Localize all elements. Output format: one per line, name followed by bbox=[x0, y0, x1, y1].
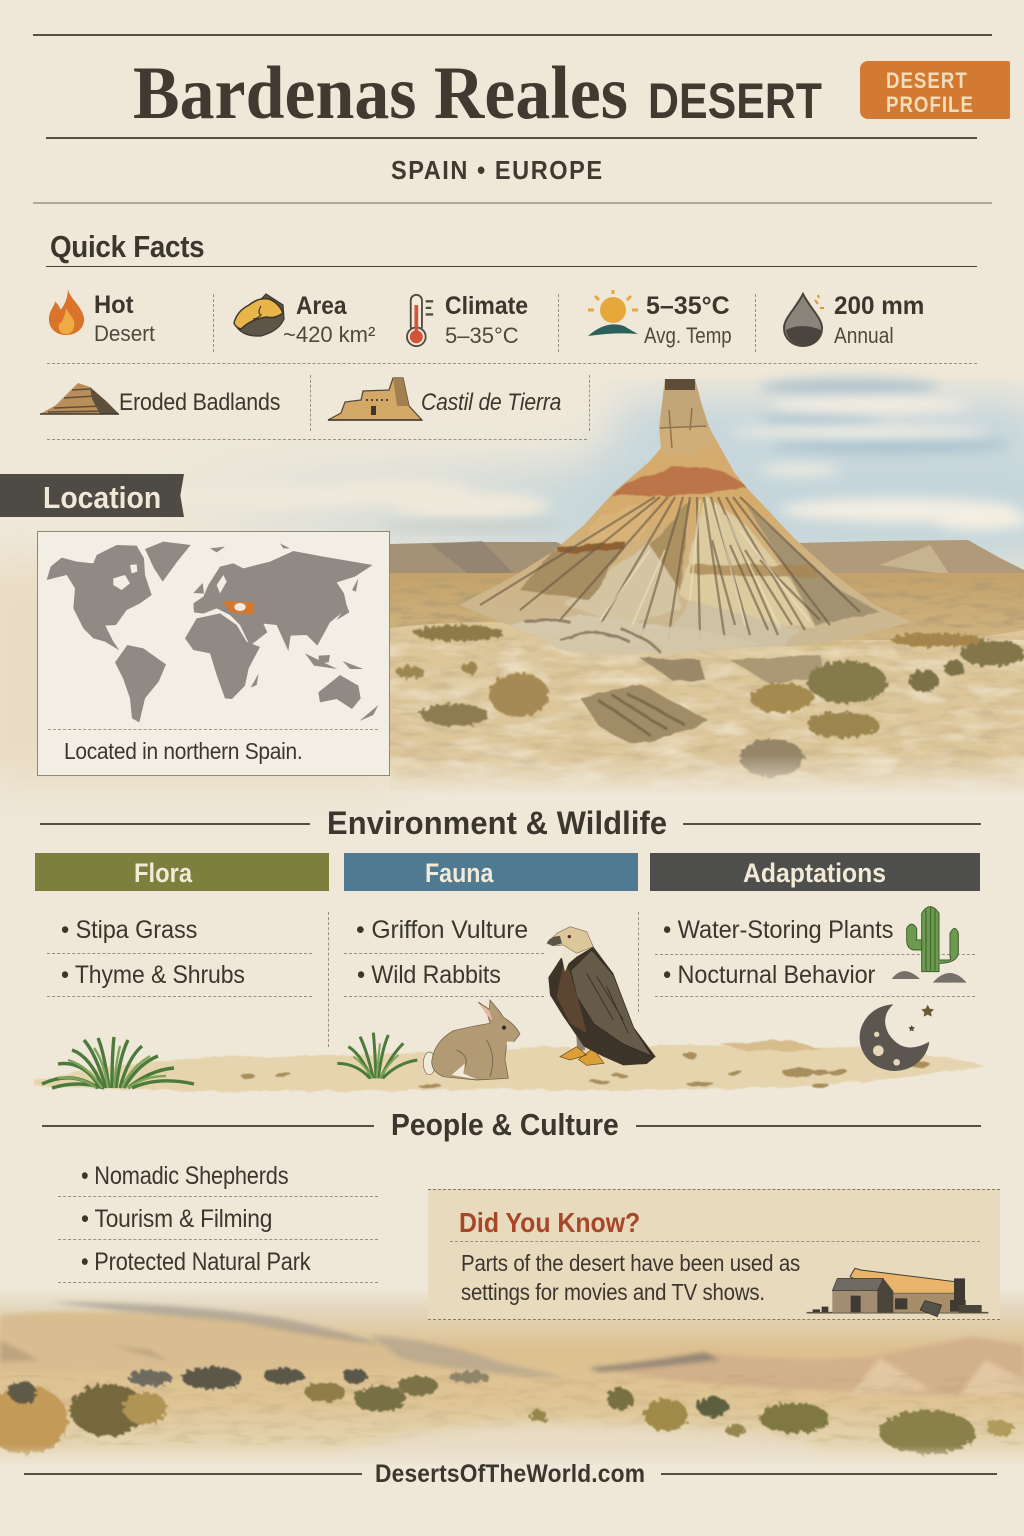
icon: film set building bbox=[806, 1268, 988, 1318]
people and culture list: • Tourism & Filming bbox=[81, 1205, 272, 1233]
fact: hot desert: Hot bbox=[94, 291, 134, 319]
flora ground strip bbox=[35, 1040, 985, 1091]
left sand tint behind map bbox=[0, 560, 410, 785]
background landscape illustration bbox=[0, 372, 1024, 1462]
callout: did you know bbox=[428, 1189, 1000, 1320]
icon: badlands bbox=[40, 383, 119, 415]
header rule top bbox=[33, 34, 992, 36]
fact: eroded badlands: Eroded Badlands bbox=[119, 389, 280, 416]
people and culture list: • Protected Natural Park bbox=[81, 1248, 311, 1276]
bottom landscape bbox=[0, 1285, 1024, 1470]
panel: adaptations: • Nocturnal Behavior bbox=[663, 961, 875, 989]
flora header: Flora bbox=[134, 858, 192, 888]
adaptations header bbox=[650, 853, 980, 891]
icon: cactus bbox=[892, 906, 966, 983]
distant mesas bbox=[390, 540, 1024, 578]
fact: annual rainfall bbox=[834, 292, 924, 348]
title: Bardenas Reales bbox=[133, 52, 628, 135]
fact: average temperature: 5–35°C bbox=[646, 292, 730, 320]
heading: people & culture: People & Culture bbox=[391, 1107, 619, 1142]
title: DESERT bbox=[648, 73, 822, 129]
fact: hot desert: Desert bbox=[94, 321, 155, 346]
icon: griffon vulture bbox=[546, 926, 656, 1066]
panel: location map bbox=[37, 531, 390, 776]
fact: area: ~420 km² bbox=[283, 322, 375, 347]
badge: desert profile bbox=[860, 61, 1010, 119]
adaptations header: Adaptations bbox=[743, 858, 886, 888]
lower landscape edge fade bbox=[0, 1445, 1024, 1470]
fact: climate bbox=[445, 292, 528, 348]
adaptations list: • Water-Storing Plants bbox=[663, 916, 893, 944]
fact: annual rainfall: 200 mm bbox=[834, 292, 924, 320]
Castil de Tierra butte bbox=[450, 375, 920, 660]
flora header bbox=[35, 853, 329, 891]
badge: desert profile: DESERT bbox=[886, 68, 968, 93]
panel: flora bbox=[35, 853, 329, 997]
callout: did you know: settings for movies and TV shows. bbox=[461, 1279, 765, 1305]
flora list: • Stipa Grass bbox=[61, 916, 197, 944]
upper shrubs bbox=[396, 625, 1024, 777]
fact: average temperature: Avg. Temp bbox=[644, 323, 732, 348]
people and culture list bbox=[58, 1162, 378, 1283]
icon: thermometer bbox=[406, 294, 434, 348]
footer rule and site name: DesertsOfTheWorld.com bbox=[375, 1460, 645, 1488]
panel: quick facts row 1 bbox=[48, 289, 924, 348]
heading: environment & wildlife: Environment & Wildlife bbox=[327, 805, 667, 841]
fact: climate: Climate bbox=[445, 292, 528, 320]
fact: climate: 5–35°C bbox=[445, 323, 519, 348]
panel: fauna bbox=[344, 853, 638, 997]
panel: quick facts row 2 bbox=[40, 377, 561, 421]
heading: quick facts: Quick Facts bbox=[50, 229, 204, 264]
icon: grass clump bbox=[41, 1036, 194, 1090]
callout: did you know: Parts of the desert have been used as bbox=[461, 1250, 800, 1276]
fact: area: Area bbox=[296, 292, 347, 320]
icon: flame bbox=[48, 289, 84, 335]
icon: shrub bbox=[337, 1032, 418, 1080]
fauna header: Fauna bbox=[425, 858, 493, 888]
icon: sun over land bbox=[588, 290, 638, 336]
icon: area rock bbox=[233, 293, 285, 337]
desert floor bbox=[390, 573, 1024, 800]
sky bbox=[150, 378, 1024, 565]
icon: water drop bbox=[783, 292, 824, 347]
butte foreground mounds bbox=[525, 620, 760, 654]
icon: moon and stars bbox=[860, 1004, 934, 1071]
subtitle: SPAIN • EUROPE bbox=[391, 155, 604, 185]
fact: area bbox=[283, 292, 375, 347]
people and culture list: • Nomadic Shepherds bbox=[81, 1162, 288, 1190]
icon: castle ruin bbox=[328, 377, 424, 421]
badge: desert profile: PROFILE bbox=[886, 92, 974, 117]
map caption: Located in northern Spain. bbox=[64, 738, 302, 764]
fact: hot desert bbox=[94, 291, 155, 346]
location tab: Location bbox=[43, 480, 161, 515]
world map bbox=[46, 542, 378, 722]
location tab bbox=[0, 474, 184, 517]
panel: flora: • Thyme & Shrubs bbox=[61, 961, 245, 989]
fauna list: • Griffon Vulture bbox=[356, 916, 528, 944]
panel: adaptations bbox=[650, 853, 980, 997]
icon: rabbit bbox=[423, 999, 520, 1080]
fact: annual rainfall: Annual bbox=[834, 323, 894, 348]
callout: did you know: Did You Know? bbox=[459, 1207, 640, 1238]
fauna header bbox=[344, 853, 638, 891]
fact: castil de tierra: Castil de Tierra bbox=[421, 389, 561, 416]
fact: average temperature bbox=[644, 292, 732, 348]
panel: fauna: • Wild Rabbits bbox=[357, 961, 501, 989]
